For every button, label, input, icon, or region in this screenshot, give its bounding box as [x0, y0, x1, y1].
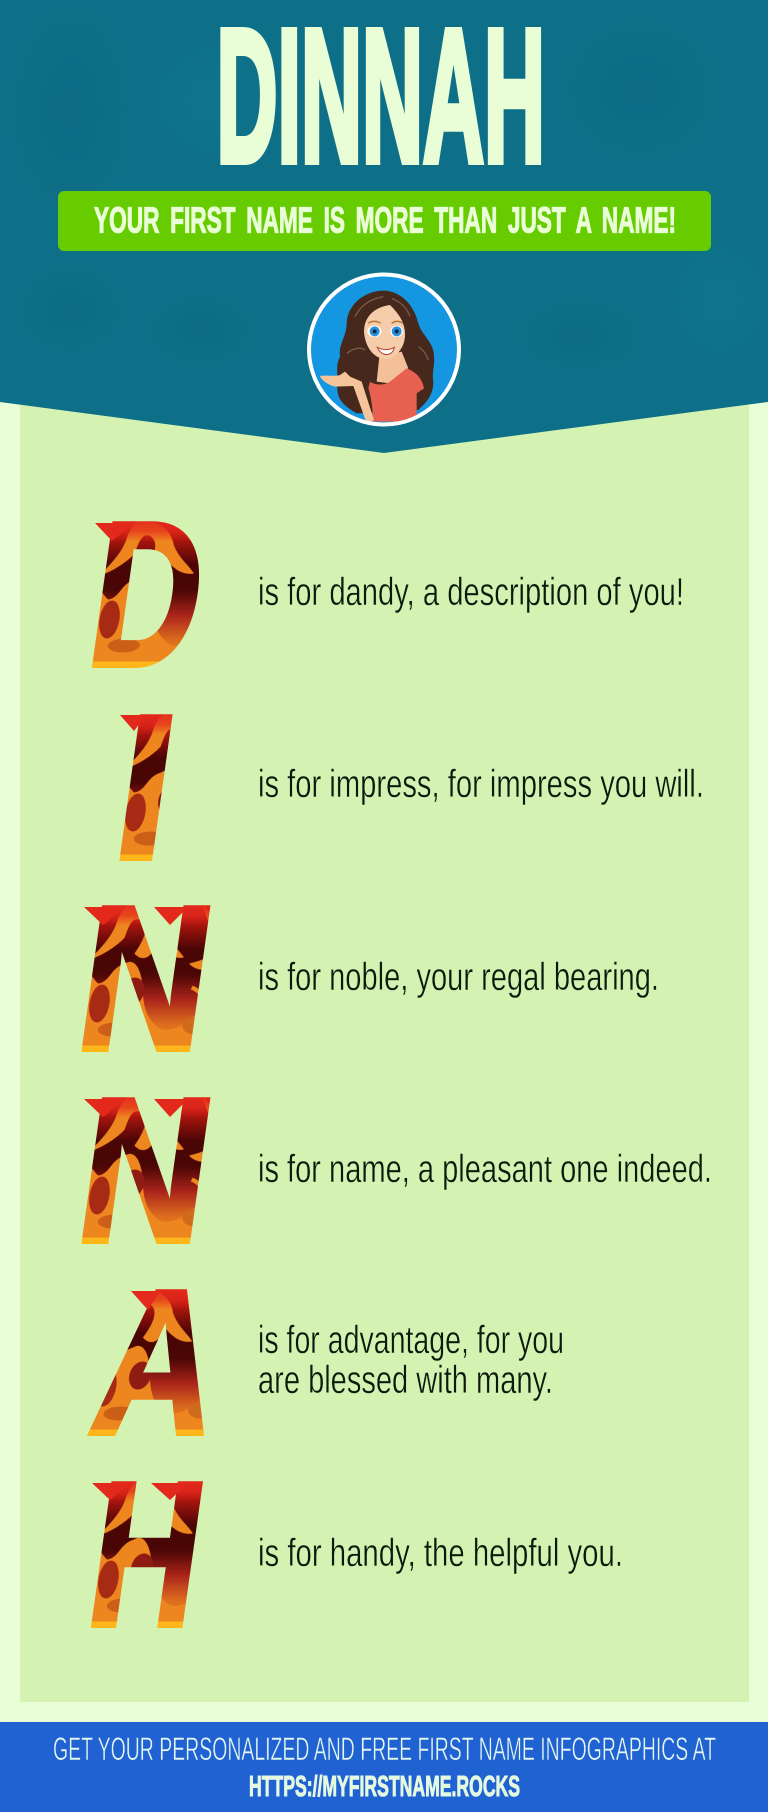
letter I: I: [103, 672, 189, 902]
footer: HTTPS://MYFIRSTNAME.ROCKS: [249, 1771, 520, 1803]
panel: letters: [20, 400, 749, 1702]
header banner: [0, 0, 768, 453]
tagline bar: [58, 191, 711, 251]
text: A lines: [258, 1319, 564, 1402]
text: A lines: are blessed with many.: [258, 1359, 553, 1402]
letter N: N: [66, 1055, 226, 1285]
letter N: N: [66, 863, 226, 1093]
letter D: D: [78, 479, 218, 709]
text: A lines: is for advantage, for you: [258, 1319, 564, 1362]
letter A: A: [78, 1247, 239, 1477]
icon: woman avatar: [309, 274, 459, 424]
letter H: H: [77, 1439, 217, 1669]
footer: [0, 1722, 768, 1812]
text: H line: is for handy, the helpful you.: [258, 1532, 623, 1575]
